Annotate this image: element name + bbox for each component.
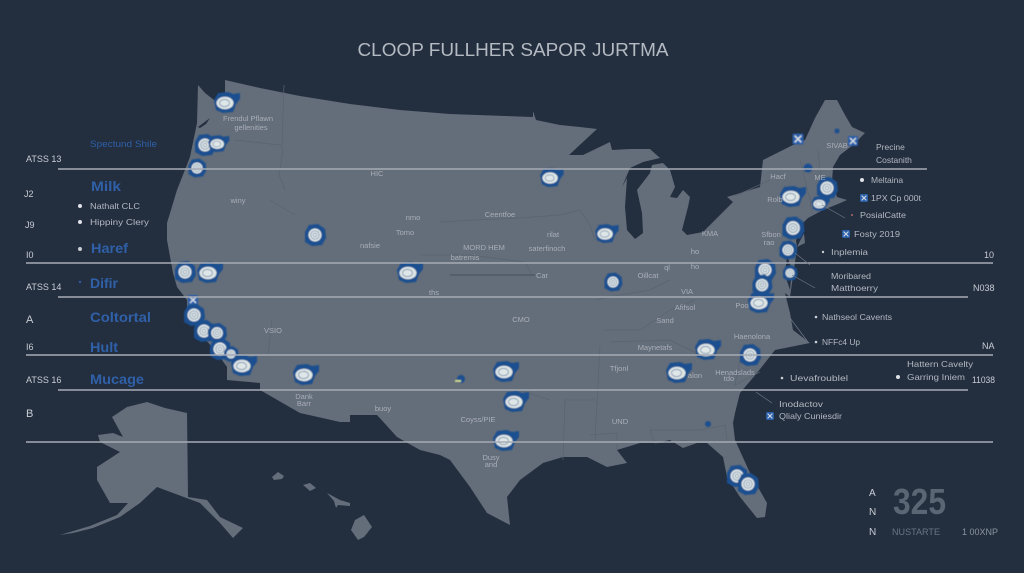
stat block: A [869, 488, 876, 499]
map place labels: Afifsol [675, 303, 696, 312]
map place labels: Henadslads [715, 368, 755, 377]
map place labels: Haenolona [734, 332, 771, 341]
right annotations [766, 142, 995, 421]
stat block: 325 [893, 481, 946, 522]
map place labels: ths [429, 288, 439, 297]
map place labels: VIA [681, 287, 693, 296]
horizontal rule lines [26, 169, 993, 442]
right annotations: Precine [876, 142, 905, 152]
map place labels: ME [814, 173, 826, 182]
map place labels: Oillcat [638, 271, 659, 280]
map place labels: Dank [295, 392, 313, 401]
right annotations: Moribared [831, 271, 871, 281]
map place labels: ho [691, 247, 699, 256]
right annotations: 10 [984, 250, 994, 260]
title: CLOOP FULLHER SAPOR JURTMA [358, 39, 669, 60]
map place labels: Sfbon [761, 230, 781, 239]
map place labels: tdo [724, 374, 734, 383]
map place labels: Poo [735, 301, 749, 310]
right annotations: PosialCatte [860, 210, 906, 220]
right annotations: Garring Iniem [907, 372, 965, 382]
map place labels: nafsie [360, 241, 380, 250]
right annotations: Qlialy Cuniesdir [779, 411, 842, 421]
left axis labels: B [26, 408, 33, 420]
map place labels: UND [612, 417, 629, 426]
left axis labels: ATSS 16 [26, 375, 61, 385]
right annotations: Meltaina [871, 175, 903, 185]
stat block [869, 481, 998, 538]
stat block: 1 00XNP [962, 527, 998, 537]
map place labels: Maynetafs [638, 343, 673, 352]
left category list: Difir [90, 275, 119, 291]
right annotations: NFFc4 Up [822, 337, 860, 347]
map place labels: saterfinoch [529, 244, 565, 253]
left category list: Spectund Shile [90, 139, 157, 150]
map place labels: MORD HEM [463, 243, 505, 252]
left category list: Hippiny Clery [90, 217, 150, 227]
map place labels: ql [664, 263, 670, 272]
icon: badge [766, 412, 774, 420]
map place labels: Tomo [396, 228, 414, 237]
coastal leader lines [756, 205, 845, 403]
map place labels [223, 114, 848, 469]
stat block: N [869, 507, 876, 518]
map place labels: Hacf [770, 172, 787, 181]
right annotations: N038 [973, 283, 995, 293]
right annotations: Nathseol Cavents [822, 312, 892, 322]
left axis labels [24, 154, 61, 420]
right annotations: Inplemia [831, 247, 868, 257]
right annotations: NA [982, 341, 995, 351]
left category list: Hult [90, 339, 118, 355]
map place labels: HIC [371, 169, 384, 178]
map place labels: gellenities [234, 123, 268, 132]
right annotations: Costanith [876, 155, 912, 165]
map place labels: KMA [702, 229, 718, 238]
right annotations: Uevafroublel [790, 373, 848, 383]
left category list: Haref [91, 240, 128, 256]
map: Hawaii [272, 472, 372, 540]
map place labels: buoy [375, 404, 391, 413]
stat block: NUSTARTE [892, 527, 940, 537]
map: contiguous United States [167, 80, 865, 525]
map place labels: winy [229, 196, 246, 205]
left axis labels: I6 [26, 342, 34, 352]
map: lake and bay cutouts [178, 118, 822, 328]
map place labels: Coyss/PIE [460, 415, 496, 424]
map markers [175, 92, 858, 495]
right annotations: Inodactov [779, 399, 824, 409]
map place labels: SIVAB [826, 141, 848, 150]
map: Alaska [60, 402, 243, 538]
left category list: Coltortal [90, 309, 151, 325]
map place labels: Rolb [767, 195, 783, 204]
map place labels: nmo [406, 213, 420, 222]
map place labels: rao [764, 238, 774, 247]
left axis labels: J9 [25, 220, 35, 230]
icon: badge [860, 194, 868, 202]
map place labels: rilat [547, 230, 560, 239]
left category list [78, 139, 157, 387]
right annotations: 11038 [972, 375, 995, 385]
stat block: N [869, 527, 876, 538]
map: state borders [235, 85, 822, 460]
map place labels: ho [691, 262, 699, 271]
map place labels: and [485, 460, 497, 469]
left axis labels: ATSS 13 [26, 154, 61, 164]
icon: badge [842, 230, 850, 238]
map place labels: Dusy [482, 453, 500, 462]
map place labels: batremis [451, 253, 480, 262]
map place labels: Sand [656, 316, 674, 325]
left category list: Milk [91, 178, 121, 194]
left axis labels: I0 [26, 250, 34, 260]
map place labels: Frendul Pflawn [223, 114, 273, 123]
map place labels: Ceentfoe [485, 210, 515, 219]
left axis labels: A [26, 314, 34, 326]
right annotations: Matthoerry [831, 283, 879, 293]
right annotations: 1PX Cp 000t [871, 193, 922, 203]
right annotations: Fosty 2019 [854, 229, 900, 239]
map place labels: Barr [297, 399, 312, 408]
left category list: Mucage [90, 371, 144, 387]
right annotations: Hattern Cavelty [907, 359, 974, 369]
left axis labels: ATSS 14 [26, 282, 61, 292]
left category list: Nathalt CLC [90, 201, 140, 211]
map place labels: alon [688, 371, 702, 380]
map place labels: Tfjonl [610, 364, 629, 373]
map place labels: Car [536, 271, 549, 280]
map place labels: CMO [512, 315, 530, 324]
map place labels: VSIO [264, 326, 282, 335]
left axis labels: J2 [24, 189, 34, 199]
